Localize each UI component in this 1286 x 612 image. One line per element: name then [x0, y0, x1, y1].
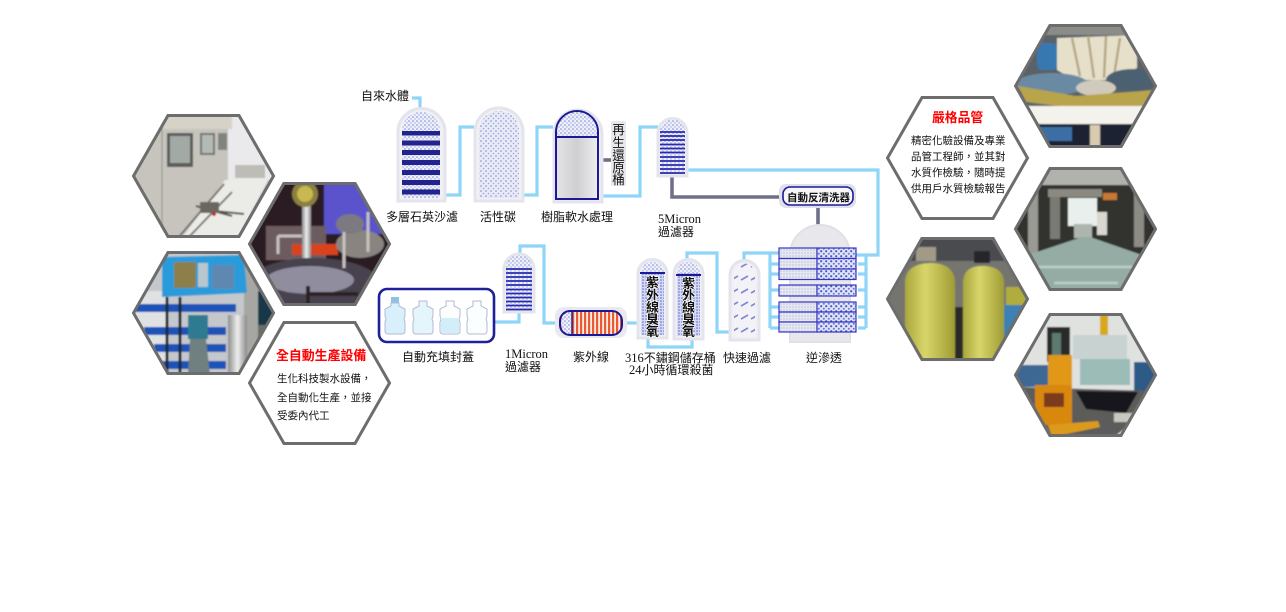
label: 1 micron filter: 1Micron	[505, 347, 549, 361]
photo hexagon: yellow softener tanks	[886, 237, 1029, 361]
box: regeneration tank: 原	[612, 161, 625, 175]
vessel: ultraviolet lamp	[555, 307, 627, 338]
vessel: fast filter	[730, 260, 759, 340]
label: tap water: 自來水體	[361, 89, 409, 103]
photo hexagon: clean-room filling line	[132, 114, 275, 238]
machine: automatic bottle filling	[379, 289, 494, 342]
vessel: ozone tank one: 外	[646, 288, 659, 303]
label: 1 micron filter: 過濾器	[505, 359, 541, 374]
box: regeneration tank: 桶	[612, 172, 625, 187]
vessel: ozone tank one: 氧	[646, 324, 659, 339]
vessel: reverse osmosis membrane stack	[779, 225, 856, 342]
vessel: ozone tank one: 臭	[646, 312, 659, 327]
vessel: ozone tank one: 紫	[646, 275, 659, 290]
label: fast filter: 快速過濾	[723, 350, 771, 365]
bottle three half	[440, 301, 460, 334]
label: automatic filling and capping: 自動充填封蓋	[402, 350, 474, 364]
vessel: ozone tank one: 線	[646, 300, 659, 315]
label: 5 micron filter: 過濾器	[658, 224, 694, 239]
gray pipes: backwash lines	[603, 160, 818, 228]
text block: production equipment: 生化科技製水設備，	[277, 372, 372, 385]
panel: strict quality control	[888, 98, 1028, 218]
text block: quality control: 精密化驗設備及專業	[911, 134, 1006, 147]
flow pipes: water lines	[412, 98, 878, 347]
vessel: ozone tank two: 外	[682, 288, 695, 303]
box: regeneration tank: 還	[612, 149, 625, 163]
text block: quality control	[911, 134, 1006, 195]
photo hexagon: bottle washing brushes	[1014, 24, 1158, 148]
label: 316 stainless storage tank: 316不鏽鋼儲存桶	[625, 350, 716, 365]
vessel: 1 micron filter	[504, 254, 534, 312]
vessel: resin softener	[554, 110, 602, 202]
vessel: ozone tank two	[674, 260, 703, 339]
label: ultraviolet: 紫外線	[573, 349, 609, 364]
photo hexagon: blue control panel and pipes	[132, 251, 275, 375]
text block: quality control: 品管工程師，並其對	[911, 150, 1006, 163]
vessel: ozone tank two: 紫	[682, 276, 695, 291]
vessel: ozone tank two: 線	[682, 300, 695, 315]
box: auto backwash controller: 自動反清洗器	[787, 191, 850, 204]
bottle two full	[413, 301, 433, 334]
vessel: ozone tank one	[638, 260, 667, 339]
label: 316 stainless storage tank: 24小時循環殺菌	[629, 363, 714, 377]
photo hexagon: bottle capping machine	[1014, 167, 1157, 291]
text block: production equipment: 全自動化生產，並接	[277, 391, 372, 404]
label: 5 micron filter	[658, 212, 702, 239]
vessel: 5 micron filter	[658, 118, 687, 176]
label: 5 micron filter: 5Micron	[658, 212, 702, 226]
label: 316 stainless storage tank	[625, 350, 716, 377]
bottle four empty	[467, 301, 487, 334]
vessel: activated carbon	[475, 108, 523, 201]
label: multi-layer quartz sand filter: 多層石英沙濾	[386, 209, 458, 224]
text block: production equipment: 受委內代工	[277, 409, 330, 422]
vessel: ozone tank two: 臭	[682, 312, 695, 327]
box: regeneration tank: 再	[612, 123, 625, 137]
vessel: ozone tank two: 氧	[682, 324, 695, 339]
panel: automatic production equipment	[250, 322, 390, 444]
label: 1 micron filter	[505, 347, 549, 374]
bottle one full	[385, 297, 405, 334]
box: regeneration tank	[611, 121, 626, 187]
label: reverse osmosis: 逆滲透	[806, 350, 842, 365]
label: resin softener: 樹脂軟水處理	[541, 209, 613, 224]
label: activated carbon: 活性碳	[480, 210, 516, 224]
text block: production equipment	[277, 372, 372, 422]
box: regeneration tank: 生	[612, 136, 625, 150]
text block: quality control: 供用戶水質檢驗報告	[911, 182, 1006, 195]
photo hexagon: stainless reactor vessels	[248, 181, 391, 310]
box: auto backwash controller	[779, 184, 856, 208]
photo hexagon: forklift with water bottles	[1014, 313, 1157, 437]
heading: quality control: 嚴格品管	[932, 110, 983, 125]
vessel: multi-layer quartz sand filter	[398, 109, 445, 201]
heading: production equipment: 全自動生產設備	[276, 348, 366, 363]
text block: quality control: 水質作檢驗，隨時提	[911, 166, 1006, 179]
